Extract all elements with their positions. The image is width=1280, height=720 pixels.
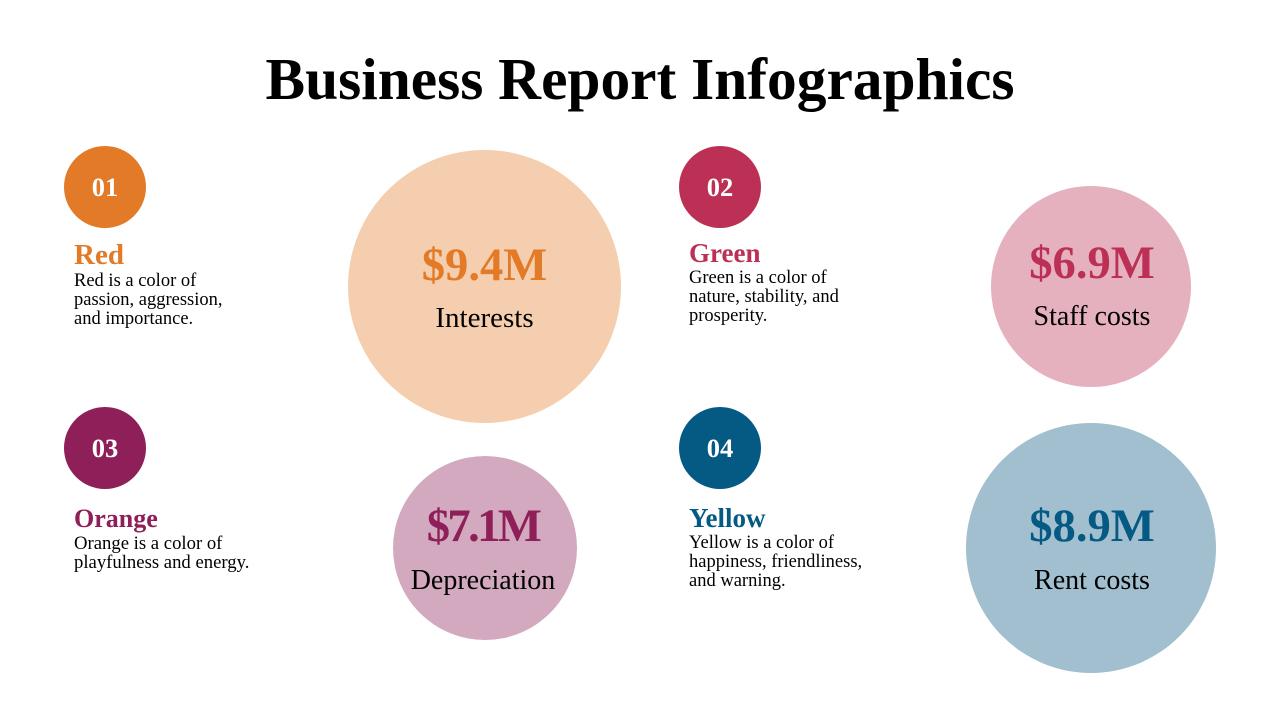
label Staff costs: Staff costs	[1034, 301, 1150, 332]
description Green	[689, 268, 839, 326]
description Red: Red is a color of	[74, 271, 196, 291]
description Orange	[74, 533, 249, 573]
heading Yellow: Yellow	[689, 503, 766, 533]
description Yellow: Yellow is a color of	[689, 533, 834, 553]
badge 02	[679, 146, 761, 228]
heading Red: Red	[74, 239, 124, 271]
description Orange: Orange is a color of	[74, 533, 222, 554]
badge 03	[64, 407, 146, 489]
value $7.1M: $7.1M	[427, 500, 539, 552]
label Depreciation: Depreciation	[411, 565, 555, 596]
description Green: nature, stability, and	[689, 287, 839, 307]
label Interests: Interests	[435, 302, 534, 334]
bubble: Staff costs	[991, 186, 1191, 387]
bubble: Rent costs	[966, 423, 1216, 673]
panel: 01 Red	[64, 146, 222, 329]
description Yellow: happiness, friendliness,	[689, 552, 862, 572]
badge 04: 04	[707, 433, 733, 463]
title: Business Report Infographics	[265, 46, 1015, 112]
badge 02: 02	[707, 172, 733, 202]
description Orange: playfulness and energy.	[74, 552, 249, 573]
panel: 03 Orange	[64, 407, 249, 573]
value $6.9M: $6.9M	[1029, 237, 1155, 289]
panel: 02 Green	[679, 146, 839, 326]
bubble: Interests	[348, 150, 621, 423]
label Rent costs: Rent costs	[1034, 565, 1150, 596]
badge 01	[64, 146, 146, 228]
description Green: prosperity.	[689, 306, 767, 326]
description Yellow: and warning.	[689, 571, 786, 591]
badge 01: 01	[92, 172, 118, 202]
description Green: Green is a color of	[689, 268, 827, 288]
description Yellow	[689, 533, 862, 591]
description Red	[74, 271, 222, 329]
description Red: and importance.	[74, 309, 193, 329]
value $9.4M: $9.4M	[422, 239, 547, 291]
description Red: passion, aggression,	[74, 290, 222, 310]
value $8.9M: $8.9M	[1029, 500, 1155, 552]
heading Orange: Orange	[74, 504, 158, 533]
badge 03: 03	[92, 433, 118, 463]
heading Green: Green	[689, 238, 760, 268]
bubble: Depreciation	[393, 456, 577, 640]
panel: 04 Yellow	[679, 407, 862, 591]
badge 04	[679, 407, 761, 489]
